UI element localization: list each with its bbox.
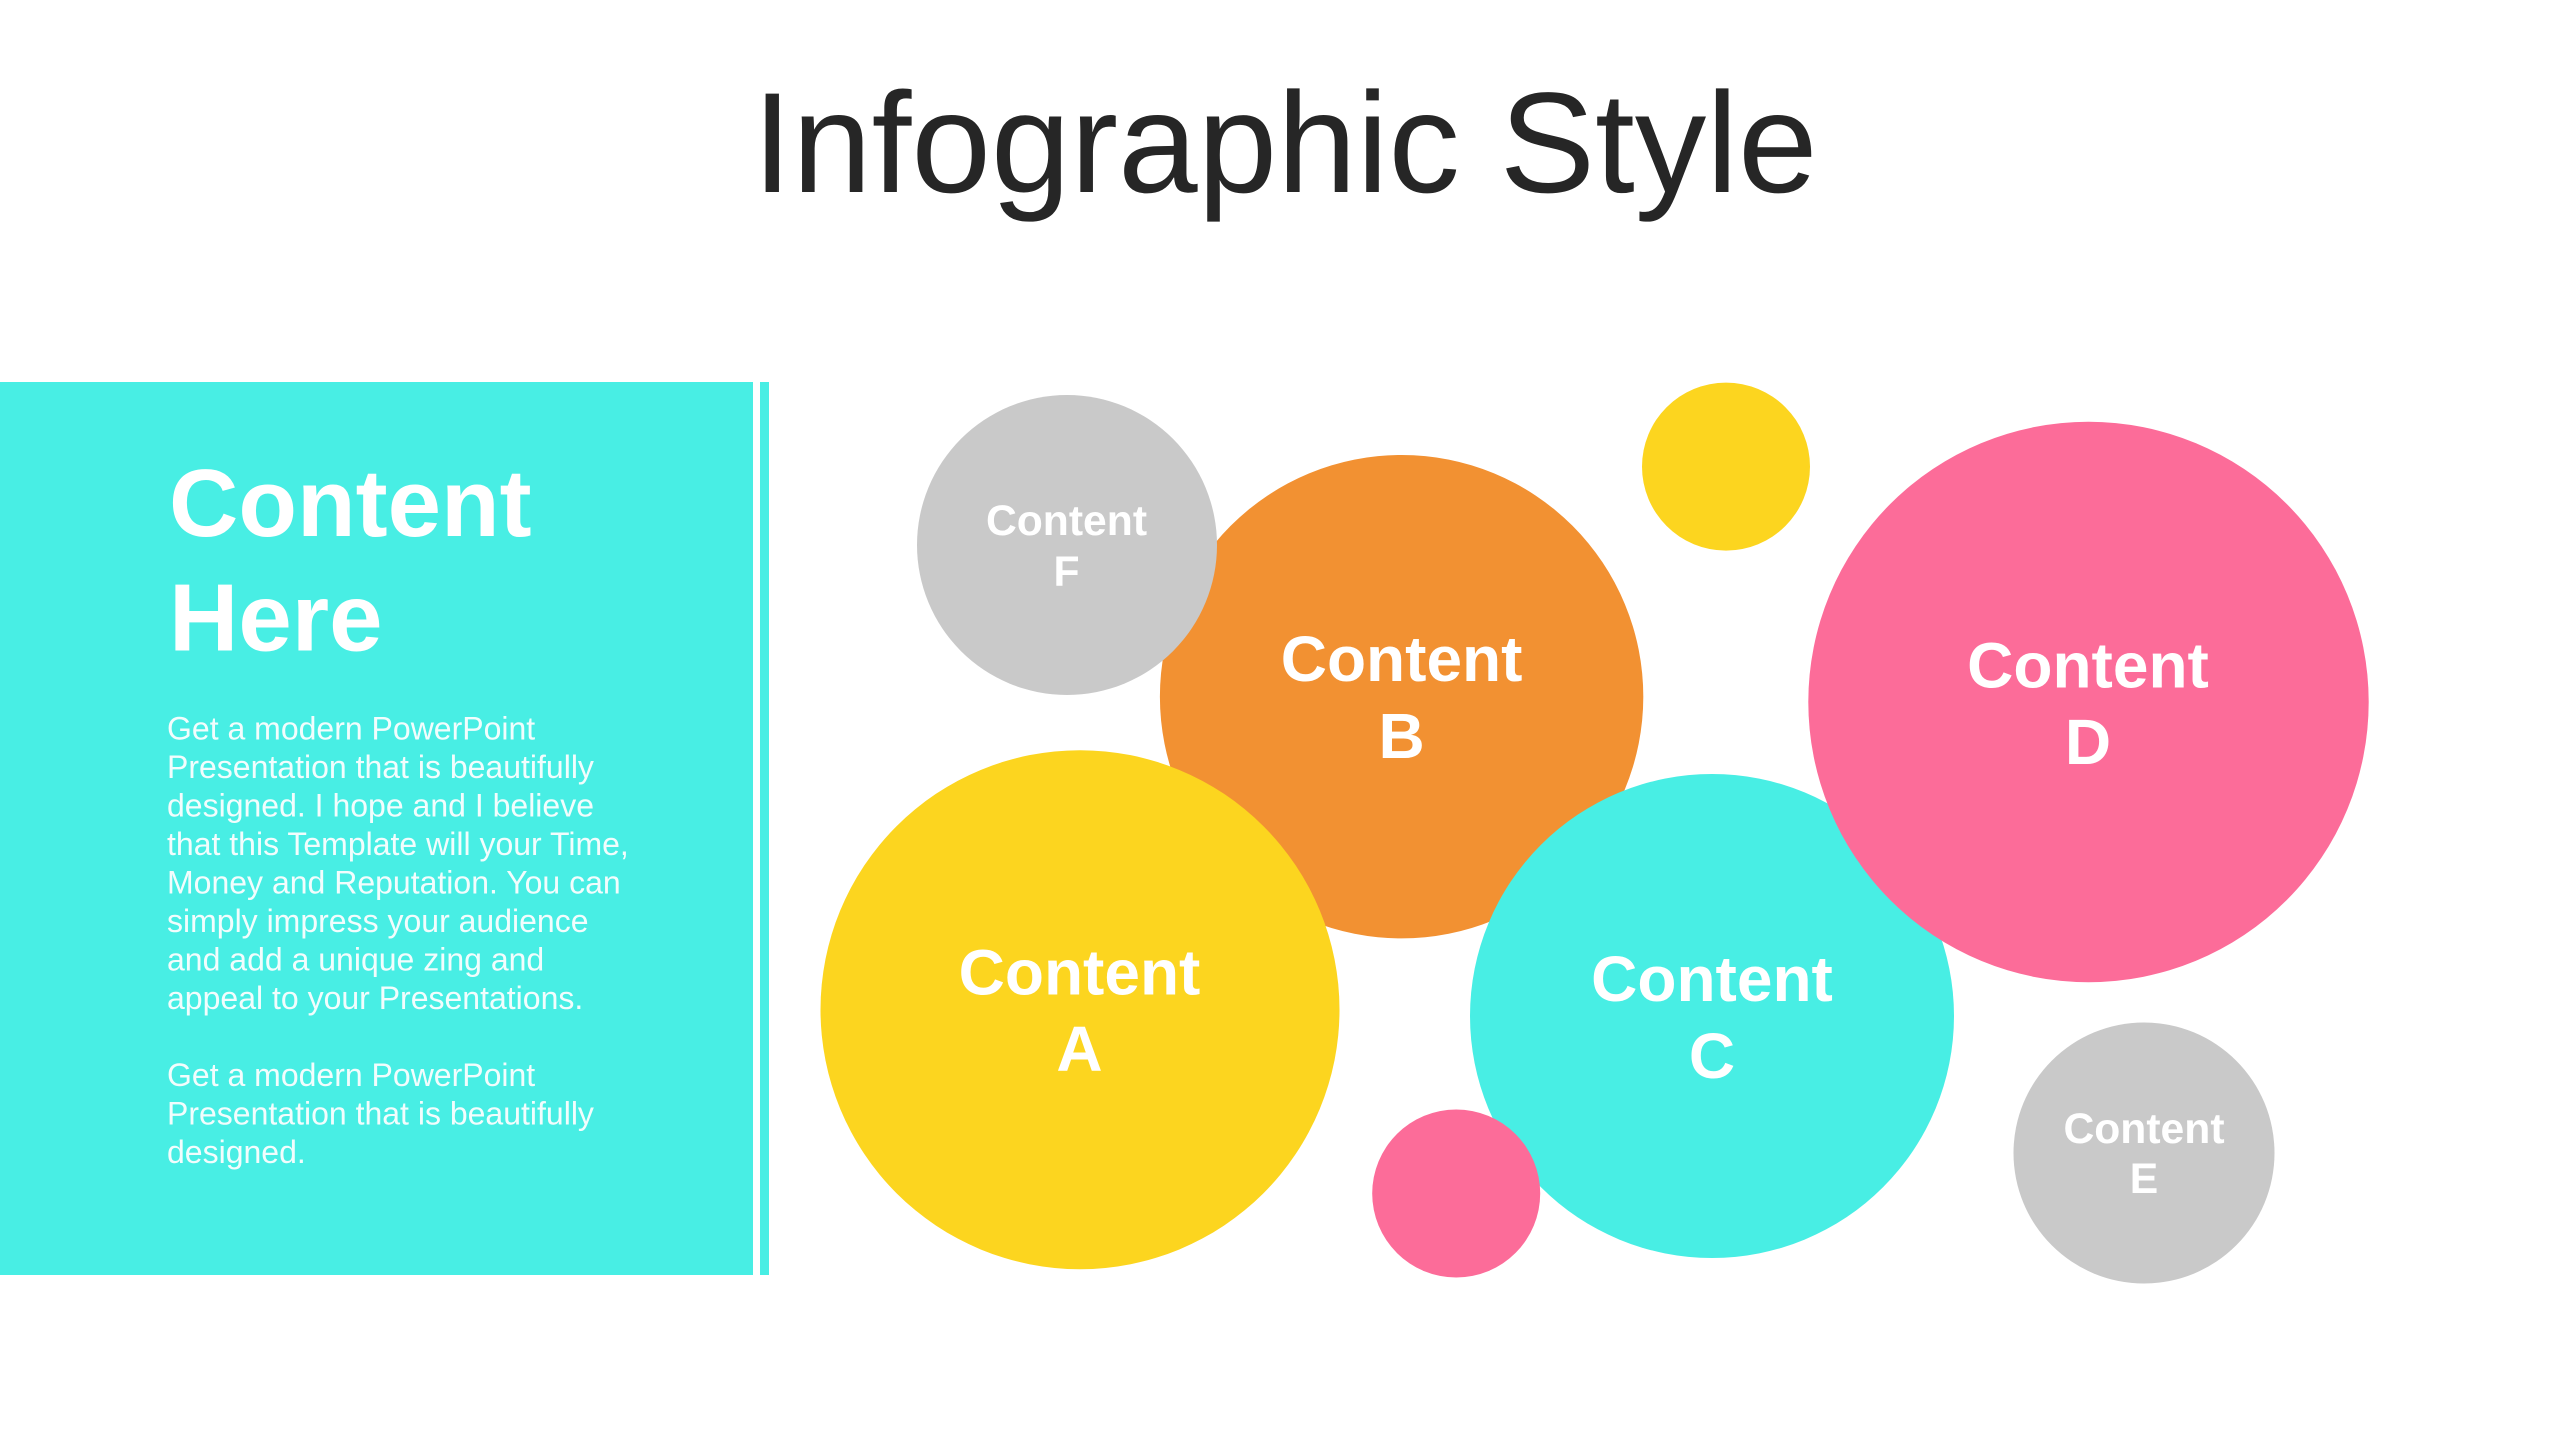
- bubble: Content D: D: [2065, 706, 2111, 778]
- panel heading: Content: [169, 450, 532, 557]
- panel body text: and add a unique zing and: [167, 942, 544, 978]
- panel body text: simply impress your audience: [167, 903, 588, 939]
- bubble: Content A: [820, 750, 1340, 1269]
- bubble: Content E: Content: [2063, 1105, 2225, 1153]
- panel body text: designed. I hope and I believe: [167, 788, 594, 824]
- bubble: Content F: [917, 395, 1217, 695]
- bubble: Content C: C: [1689, 1020, 1735, 1092]
- panel accent stripe: [760, 382, 769, 1275]
- panel heading: Here: [169, 564, 382, 672]
- panel body text: Get a modern PowerPoint: [167, 1057, 535, 1093]
- panel body text: [167, 710, 629, 1170]
- bubble: Content D: Content: [1967, 630, 2209, 702]
- panel: content here: [0, 382, 769, 1275]
- bubble: Content B: Content: [1281, 623, 1522, 695]
- panel body text: appeal to your Presentations.: [167, 980, 583, 1016]
- panel body text: Presentation that is beautifully: [167, 749, 594, 785]
- bubble: Content D: [1808, 422, 2369, 982]
- bubble: Content B: B: [1378, 700, 1425, 772]
- small pink circle: [1372, 1110, 1540, 1278]
- panel body text: Get a modern PowerPoint: [167, 710, 535, 746]
- bubble: Content F: F: [1053, 548, 1080, 596]
- bubble: Content E: E: [2130, 1155, 2158, 1203]
- panel body text: Money and Reputation. You can: [167, 864, 621, 900]
- title: Infographic Style: [752, 64, 1818, 223]
- bubble: Content E: [2014, 1022, 2274, 1284]
- panel heading: [169, 450, 532, 672]
- bubble: Content B: [1160, 455, 1643, 938]
- bubble: Content A: A: [1056, 1013, 1103, 1085]
- bubble: Content C: Content: [1591, 943, 1833, 1015]
- bubble: Content A: Content: [959, 936, 1200, 1008]
- bubble: Content C: [1470, 774, 1954, 1258]
- panel body text: designed.: [167, 1134, 306, 1170]
- bubble: Content F: Content: [986, 497, 1147, 545]
- panel body text: that this Template will your Time,: [167, 826, 629, 862]
- small yellow circle: [1642, 383, 1810, 551]
- panel body text: Presentation that is beautifully: [167, 1096, 594, 1132]
